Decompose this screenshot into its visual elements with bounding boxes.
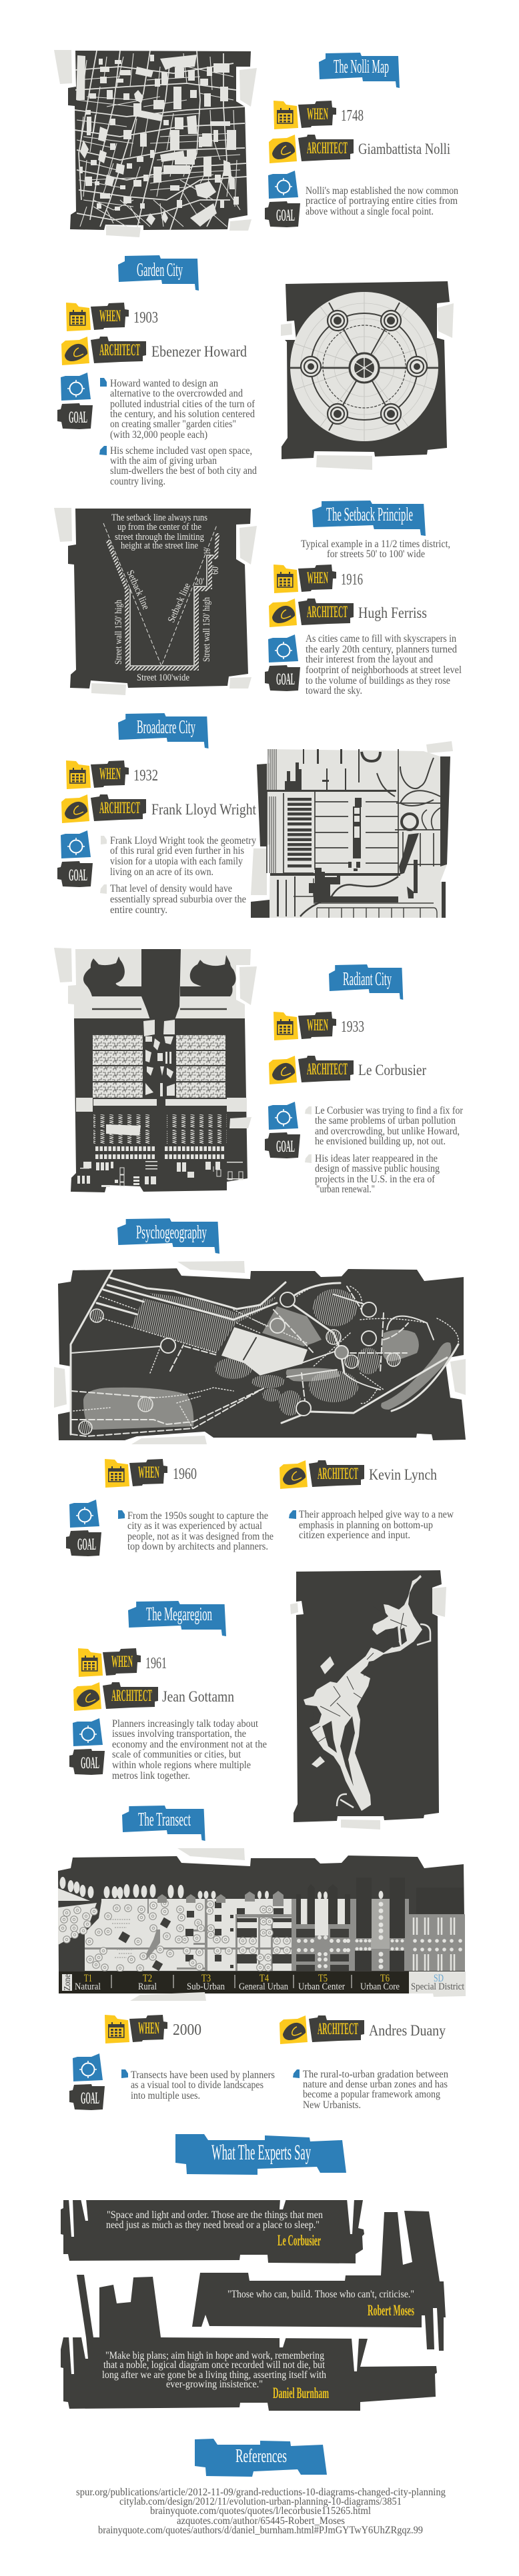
text: Megaregion goal (112, 1718, 267, 1782)
legend: transect zone bar: T1 (84, 1973, 92, 1984)
text: Broadacre goal two: That level of density would have (110, 883, 232, 894)
badge: when 1932: 1932 (133, 767, 158, 784)
badge: architect Giambattista Nolli: ARCHITECT (307, 139, 348, 157)
text: Garden City goal one: alternative to the overcrowded and (110, 388, 243, 399)
text: Nolli goal: above without a single focal point. (306, 206, 434, 217)
legend: transect zone bar: Urban Center (298, 1981, 345, 1992)
text: Psychogeography goal one: city as it was experienced by actual (127, 1520, 262, 1532)
diagram: setback section: Setback line (166, 581, 193, 625)
panel: The Nolli Map (54, 50, 458, 237)
text: Garden City goal two (110, 445, 257, 487)
badge: when 1916: 1916 (341, 571, 363, 589)
map: Northeast megaregion (290, 1570, 446, 1830)
panel: The Setback Principle (54, 501, 462, 696)
bullet (121, 2069, 128, 2078)
badge: when 1916 (274, 565, 363, 593)
text: Transect goal two: New Urbanists. (303, 2099, 361, 2111)
text: Transect goal two: nature and dense urban zones and has (303, 2079, 448, 2090)
text: Transect goal two: The rural-to-urban gradation between (303, 2069, 448, 2080)
diagram: setback section: 20' (195, 577, 204, 587)
text: Psychogeography goal two: citizen experience and input. (299, 1530, 410, 1541)
badge: when 1960: 1960 (173, 1466, 197, 1483)
badge: architect Hugh Ferriss: ARCHITECT (307, 603, 348, 621)
legend: transect zone bar: Urban Core (360, 1981, 400, 1992)
diagram: setback section: Setback line (124, 569, 151, 611)
panel: Psychogeography (54, 1218, 466, 1556)
text: Radiant goal one: the same problems of urban pollution (315, 1115, 456, 1126)
diagram: setback section: Street 100'wide (137, 672, 189, 683)
text: Nolli goal: practice of portraying entire cities from (306, 195, 458, 207)
map: Nolli figure-ground plan (54, 50, 257, 237)
text: Broadacre goal two: essentially spread suburbia over the (110, 894, 246, 905)
text: setback goal: to the volume of buildings as they rose (306, 675, 450, 686)
badge: when 1932: WHEN (99, 765, 121, 783)
quote: Le Corbusier: "Space and light and order. Those are the things that men (107, 2209, 323, 2221)
text: reference list: spur.org/publications/article/2012-11-09/grand-reductions-10-diagrams-changed-city-planning (76, 2487, 446, 2498)
diagram: setback section: Street wall 150' high (113, 600, 124, 664)
heading: The Transect: The Transect (138, 1809, 191, 1830)
icon: goal (265, 171, 300, 227)
text: Psychogeography goal two: emphasis in planning on bottom-up (299, 1520, 433, 1531)
panel: The Nolli Map: GOAL (276, 207, 295, 225)
badge: architect Le Corbusier (269, 1056, 426, 1084)
diagram: transect zones (58, 1848, 465, 1971)
badge: architect Andres Duany: Andres Duany (369, 2022, 446, 2039)
text: Garden City goal two: country living. (110, 476, 165, 487)
text: setback goal (306, 633, 462, 696)
bullet (99, 446, 107, 455)
text: Psychogeography goal two (299, 1509, 454, 1541)
legend: transect zone bar: T2 (143, 1973, 152, 1984)
quote: Daniel Burnham (61, 2275, 437, 2411)
text: Broadacre goal two: entire country. (110, 904, 167, 916)
diagram: setback section: street through the limiting (115, 532, 204, 543)
text: Megaregion goal: issues involving transportation, the (112, 1728, 246, 1740)
text: Garden City goal two: His scheme included vast open space, (110, 445, 252, 457)
text: Garden City goal one (110, 378, 255, 441)
text: Garden City goal one: the century, and his solution centered (110, 409, 255, 420)
panel: Psychogeography: GOAL (77, 1536, 96, 1554)
quote: Robert Moses: Robert Moses (368, 2302, 414, 2319)
text: Radiant goal two (315, 1153, 440, 1195)
badge: architect Ebenezer Howard (61, 337, 247, 365)
quote: Daniel Burnham: long after we are gone be a living thing, asserting itself with (102, 2369, 326, 2381)
quote: Le Corbusier: Le Corbusier (278, 2232, 321, 2249)
bullet (100, 378, 107, 387)
heading: What The Experts Say (175, 2134, 346, 2175)
heading: The Megaregion: The Megaregion (146, 1604, 212, 1625)
icon: goal (57, 830, 93, 887)
panel: The Megaregion: GOAL (81, 1754, 99, 1772)
text: Radiant goal one: Le Corbusier was trying to find a fix for (315, 1105, 464, 1116)
legend: transect zone bar: General Urban (239, 1981, 288, 1992)
quote: Le Corbusier (61, 2199, 364, 2263)
legend: transect zone bar: Natural (75, 1981, 101, 1992)
heading: The Nolli Map (319, 53, 400, 88)
panel: Broadacre City: GOAL (69, 866, 87, 884)
legend: transect zone bar: T6 (380, 1973, 390, 1984)
badge: when 2000 (105, 2015, 201, 2043)
quote: Daniel Burnham: ever-growing insistence." (166, 2379, 263, 2390)
badge: architect Ebenezer Howard: Ebenezer Howard (151, 343, 247, 360)
badge: architect Jean Gottamn (73, 1682, 234, 1711)
text: reference list: brainyquote.com/quotes/quotes/l/lecorbusie115265.html (150, 2505, 372, 2517)
text: Radiant goal one: and overcrowding, but unlike Howard, (315, 1126, 460, 1137)
text: Megaregion goal: economy and the environment not at the (112, 1739, 267, 1750)
icon: goal (66, 1500, 101, 1556)
text: Radiant goal two: His ideas later reappeared in the (315, 1153, 438, 1164)
panel: References (76, 2439, 446, 2536)
text: Transect goal one: Transects have been used by planners (131, 2069, 275, 2081)
heading: Broadacre City: Broadacre City (137, 716, 195, 738)
heading: Psychogeography: Psychogeography (136, 1222, 207, 1243)
heading: The Setback Principle: The Setback Principle (326, 504, 413, 525)
legend: transect zone bar: Sub-Urban (187, 1981, 225, 1992)
text: setback goal: footprint of neighborhoods at street level (306, 664, 462, 676)
quote: Robert Moses: "Those who can, build. Those who can't, criticise." (227, 2289, 414, 2300)
badge: when 1933: WHEN (307, 1016, 328, 1034)
panel: Broadacre City (57, 713, 453, 918)
quote: Robert Moses (192, 2211, 446, 2351)
text: Garden City goal one: on creating smaller "garden cities" (110, 419, 236, 430)
diagram: setback section: up from the center of the (117, 522, 201, 533)
heading: Radiant City: Radiant City (343, 968, 392, 990)
text: Broadacre goal one: Frank Lloyd Wright took the geometry (110, 835, 256, 846)
text: Psychogeography goal one: From the 1950s sought to capture the (127, 1510, 268, 1522)
badge: when 1903: WHEN (99, 307, 121, 325)
text: Transect goal two (303, 2069, 448, 2111)
legend: transect zone bar: Rural (138, 1981, 157, 1992)
text: Megaregion goal: Planners increasingly talk today about (112, 1718, 258, 1730)
badge: when 1903: 1903 (133, 309, 158, 327)
icon: goal (57, 373, 93, 429)
badge: when 1960 (105, 1459, 197, 1488)
badge: when 1748: WHEN (307, 105, 328, 123)
text: Garden City goal one: polluted industrial cities of the turn of (110, 399, 255, 410)
panel: What The Experts Say (61, 2134, 446, 2411)
legend: transect zone bar: Special District (411, 1981, 465, 1992)
heading: The Megaregion (128, 1601, 226, 1636)
badge: when 1916: WHEN (307, 569, 328, 587)
bullet (289, 1510, 296, 1519)
quote: Daniel Burnham: Daniel Burnham (273, 2385, 329, 2401)
map: Broadacre City plan (251, 741, 453, 918)
badge: when 1961: 1961 (145, 1655, 167, 1672)
badge: when 1748: 1748 (341, 107, 364, 125)
badge: architect Giambattista Nolli (269, 135, 450, 163)
text: Psychogeography goal one: people, not as it was designed from the (127, 1531, 274, 1542)
text: Transect goal one: into multiple uses. (131, 2090, 200, 2101)
badge: architect Andres Duany (280, 2015, 446, 2044)
badge: when 1933: 1933 (341, 1018, 364, 1036)
text: Psychogeography goal two: Their approach helped give way to a new (299, 1509, 454, 1520)
heading: Garden City: Garden City (137, 259, 183, 281)
badge: architect Frank Lloyd Wright (61, 794, 257, 823)
bullet (305, 1154, 312, 1163)
quote: Le Corbusier: need just as much as they need bread or a place to sleep." (106, 2219, 320, 2231)
panel: Radiant City: GOAL (276, 1138, 295, 1156)
icon: goal (69, 1718, 105, 1775)
text: Transect goal one (131, 2069, 275, 2101)
map: Kevin Lynch mental map (54, 1261, 466, 1444)
text: Broadacre goal one: of this rural grid even further in his (110, 845, 244, 856)
badge: when 1960: WHEN (138, 1464, 159, 1482)
icon: goal (265, 635, 300, 691)
badge: architect Le Corbusier: ARCHITECT (307, 1060, 348, 1078)
bullet (100, 884, 107, 894)
text: Psychogeography goal one (127, 1510, 274, 1552)
panel: Radiant City (54, 948, 464, 1195)
badge: when 1932 (66, 760, 158, 789)
text: Nolli goal: Nolli's map established the now common (306, 185, 458, 197)
text: Radiant goal one (315, 1105, 464, 1147)
heading: The Transect (122, 1806, 205, 1841)
legend: transect zone bar: SD (434, 1973, 444, 1984)
badge: architect Giambattista Nolli: Giambattista Nolli (358, 141, 450, 157)
badge: when 1961: WHEN (111, 1653, 133, 1671)
legend: transect zone bar: T3 (201, 1973, 211, 1984)
heading: References: References (235, 2445, 287, 2467)
legend: transect zone bar: T4 (260, 1973, 269, 1984)
legend: transect zone bar: T5 (318, 1973, 328, 1984)
heading: The Setback Principle (312, 501, 426, 536)
text: setback goal: the early 20th century, planners turned (306, 644, 457, 655)
text: Broadacre goal one (110, 835, 256, 878)
text: Garden City goal two: with the aim of giving urban (110, 455, 217, 467)
text: Radiant goal two: "urban renewal." (316, 1184, 375, 1195)
legend: transect zone bar (59, 1971, 466, 2001)
badge: architect Jean Gottamn: Jean Gottamn (162, 1688, 234, 1705)
bullet (101, 836, 107, 844)
text: Garden City goal one: Howard wanted to design an (110, 378, 218, 389)
badge: architect Jean Gottamn: ARCHITECT (111, 1687, 152, 1705)
heading: The Nolli Map: The Nolli Map (334, 56, 389, 77)
heading: What The Experts Say: What The Experts Say (211, 2141, 311, 2165)
text: Transect goal one: as a visual tool to divide landscapes (131, 2079, 264, 2091)
map: Radiant City plan (54, 948, 257, 1192)
text: Psychogeography goal one: top down by architects and planners. (127, 1541, 268, 1552)
quote: Daniel Burnham: that a noble, logical diagram once recorded will not die, but (103, 2359, 325, 2371)
text: reference list: brainyquote.com/quotes/authors/d/daniel_burnham.html#PJmGYTwY6UhZRgqz.99 (98, 2525, 423, 2536)
badge: when 1903 (66, 303, 158, 331)
badge: architect Frank Lloyd Wright: Frank Lloyd Wright (151, 801, 257, 818)
badge: architect Kevin Lynch: Kevin Lynch (369, 1466, 437, 1483)
ringed trees (59, 1900, 290, 1971)
diagram: setback section: The setback line always runs (111, 513, 207, 523)
icon: goal (265, 1102, 300, 1158)
badge: when 2000: 2000 (173, 2021, 201, 2039)
text: setback subtitle: for streets 50' to 100' wide (327, 549, 425, 560)
panel: The Transect: GOAL (81, 2089, 99, 2107)
icon: goal (69, 2053, 105, 2110)
bullet (305, 1106, 312, 1114)
panel: The Transect (58, 1806, 466, 2111)
badge: when 1961 (78, 1648, 167, 1677)
text: Nolli goal (306, 185, 458, 217)
quote: Daniel Burnham: "Make big plans; aim high in hope and work, remembering (105, 2350, 324, 2361)
text: setback goal: As cities came to fill with skyscrapers in (306, 633, 456, 644)
text: Transect goal two: become a popular framework among (303, 2089, 440, 2100)
text: Radiant goal one: he envisioned building up, not out. (315, 1136, 446, 1147)
text: reference list: azquotes.com/author/65445-Robert_Moses (177, 2515, 345, 2527)
bullet (118, 1510, 125, 1519)
bullet (293, 2069, 300, 2078)
diagram: setback section (54, 508, 257, 695)
heading: Broadacre City (118, 713, 209, 748)
heading: References (195, 2439, 327, 2477)
heading: Garden City (118, 255, 199, 291)
diagram: Garden City plan (281, 281, 454, 470)
panel: Garden City: GOAL (69, 409, 87, 427)
text: setback subtitle: Typical example in a 11/2 times district, (301, 539, 450, 550)
badge: architect Andres Duany: ARCHITECT (318, 2020, 358, 2038)
text: Garden City goal two: slum-dwellers the best of both city and (110, 465, 257, 477)
text: Garden City goal one: (with 32,000 people each) (110, 429, 207, 441)
diagram: setback section: height at the street line (121, 541, 198, 551)
badge: when 1933 (274, 1012, 364, 1040)
text: reference list: citylab.com/design/2012/11/evolution-urban-planning-10-diagrams/3851 (119, 2496, 402, 2507)
text: Radiant goal two: projects in the U.S. in the era of (315, 1174, 436, 1185)
diagram: setback section: Street wall 150' high (201, 597, 212, 662)
text: Radiant goal two: design of massive public housing (315, 1163, 440, 1174)
badge: when 2000: WHEN (138, 2019, 159, 2037)
panel: The Setback Principle: GOAL (276, 670, 295, 688)
badge: when 1748 (274, 101, 364, 129)
text: Megaregion goal: within whole regions where multiple (112, 1760, 251, 1771)
text: reference list (76, 2487, 446, 2536)
badge: architect Le Corbusier: Le Corbusier (358, 1062, 426, 1078)
diagram: setback section: 10' (202, 547, 213, 555)
diagram: setback section: 60' (210, 565, 221, 575)
badge: architect Frank Lloyd Wright: ARCHITECT (99, 799, 140, 817)
heading: Psychogeography (117, 1218, 219, 1254)
text: Megaregion goal: metros link together. (112, 1770, 190, 1782)
text: Broadacre goal two (110, 883, 246, 916)
badge: architect Ebenezer Howard: ARCHITECT (99, 341, 140, 359)
text: setback goal: their interest from the layout and (306, 654, 433, 665)
badge: architect Hugh Ferriss: Hugh Ferriss (358, 605, 427, 621)
badge: architect Kevin Lynch (280, 1460, 437, 1489)
panel: Garden City (57, 255, 454, 487)
badge: architect Kevin Lynch: ARCHITECT (318, 1465, 358, 1483)
text: Megaregion goal: scale of communities or cities, but (112, 1749, 241, 1760)
text: Broadacre goal one: vision for a utopia with each family (110, 856, 243, 867)
text: setback goal: toward the sky. (306, 685, 362, 696)
text: Broadacre goal one: living on an acre of its own. (110, 866, 213, 878)
panel: The Megaregion (69, 1570, 446, 1830)
heading: Radiant City (329, 964, 403, 1000)
legend: transect zone bar: Zone (63, 1974, 73, 1991)
text: setback subtitle (301, 539, 450, 560)
badge: architect Hugh Ferriss (269, 599, 427, 627)
